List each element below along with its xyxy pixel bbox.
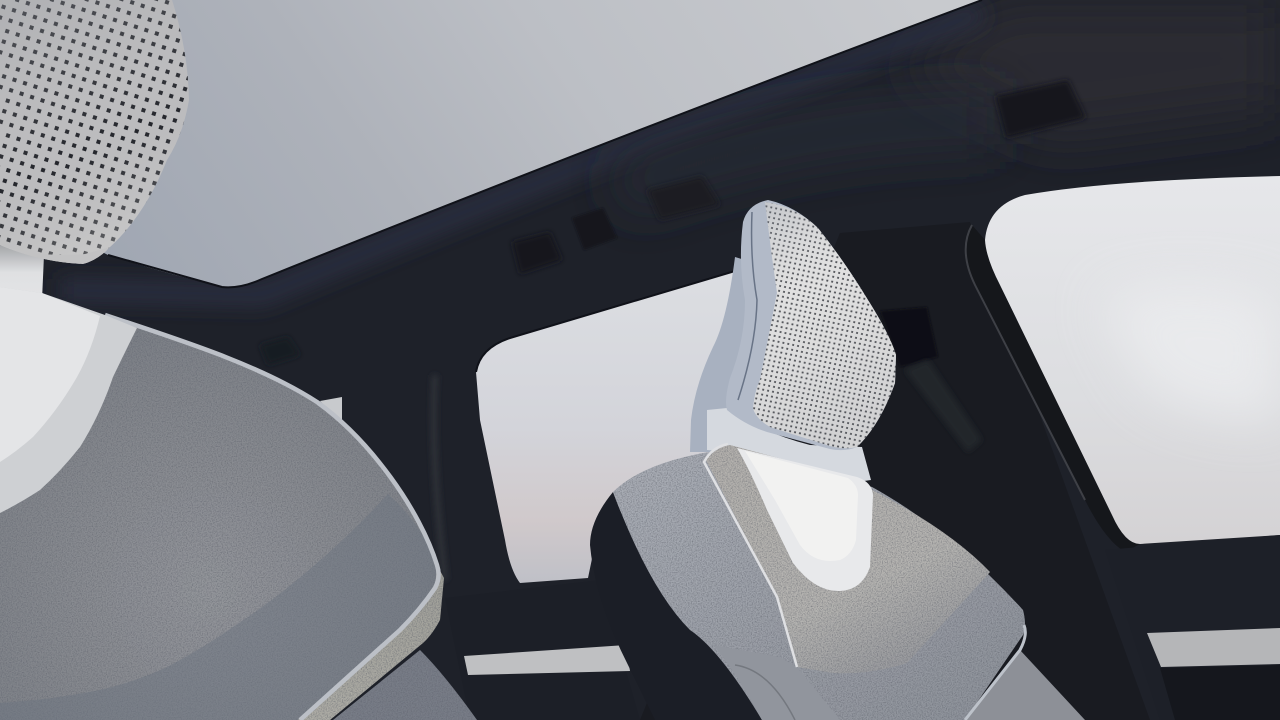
A pillar edge [966,225,1140,552]
centre seat piping [704,444,797,667]
centre seat right cushion [965,650,1085,720]
roof button [572,208,617,250]
roof light [647,176,720,220]
front side window [985,176,1280,544]
left seat white inner [0,287,100,462]
centre headrest [726,200,896,450]
centre seat [590,444,1085,720]
left headrest neck [0,245,44,300]
stem bracket [707,408,871,482]
headrest stems [690,257,871,482]
left seat white panel [0,287,137,513]
stem arm [690,257,745,452]
centre seat lower seam [735,665,795,720]
left seat [0,287,477,720]
left seat piping [105,315,439,720]
centre seat lower cushion [713,645,840,720]
roof console details [260,80,1086,365]
headrest rim [726,200,896,450]
centre seat dark back [590,492,762,720]
centre seat right piping [965,625,1025,720]
rear side window [476,271,760,583]
headrest perforation [753,202,896,448]
headrest rim seam [738,212,757,400]
speaker grille left [512,232,562,274]
left seat taupe bolster [298,565,444,720]
left seat fabric [0,315,439,720]
centre seat white plate [737,448,873,591]
grab handle [260,337,300,365]
door panel right [1105,535,1280,720]
left seat lower cushion [333,650,477,720]
centre seat plate inner [745,451,858,561]
centre seat fabric [613,448,1025,720]
small window sliver [320,397,342,425]
centre seat taupe panel [706,445,990,673]
door panel rear [445,580,640,720]
B pillar highlight [434,375,445,580]
seat belt mechanism [880,307,982,452]
panoramic sunroof glass [0,0,982,287]
speaker grille right [995,80,1086,138]
left seat lower panel [0,494,439,720]
left headrest perforated [0,0,189,264]
